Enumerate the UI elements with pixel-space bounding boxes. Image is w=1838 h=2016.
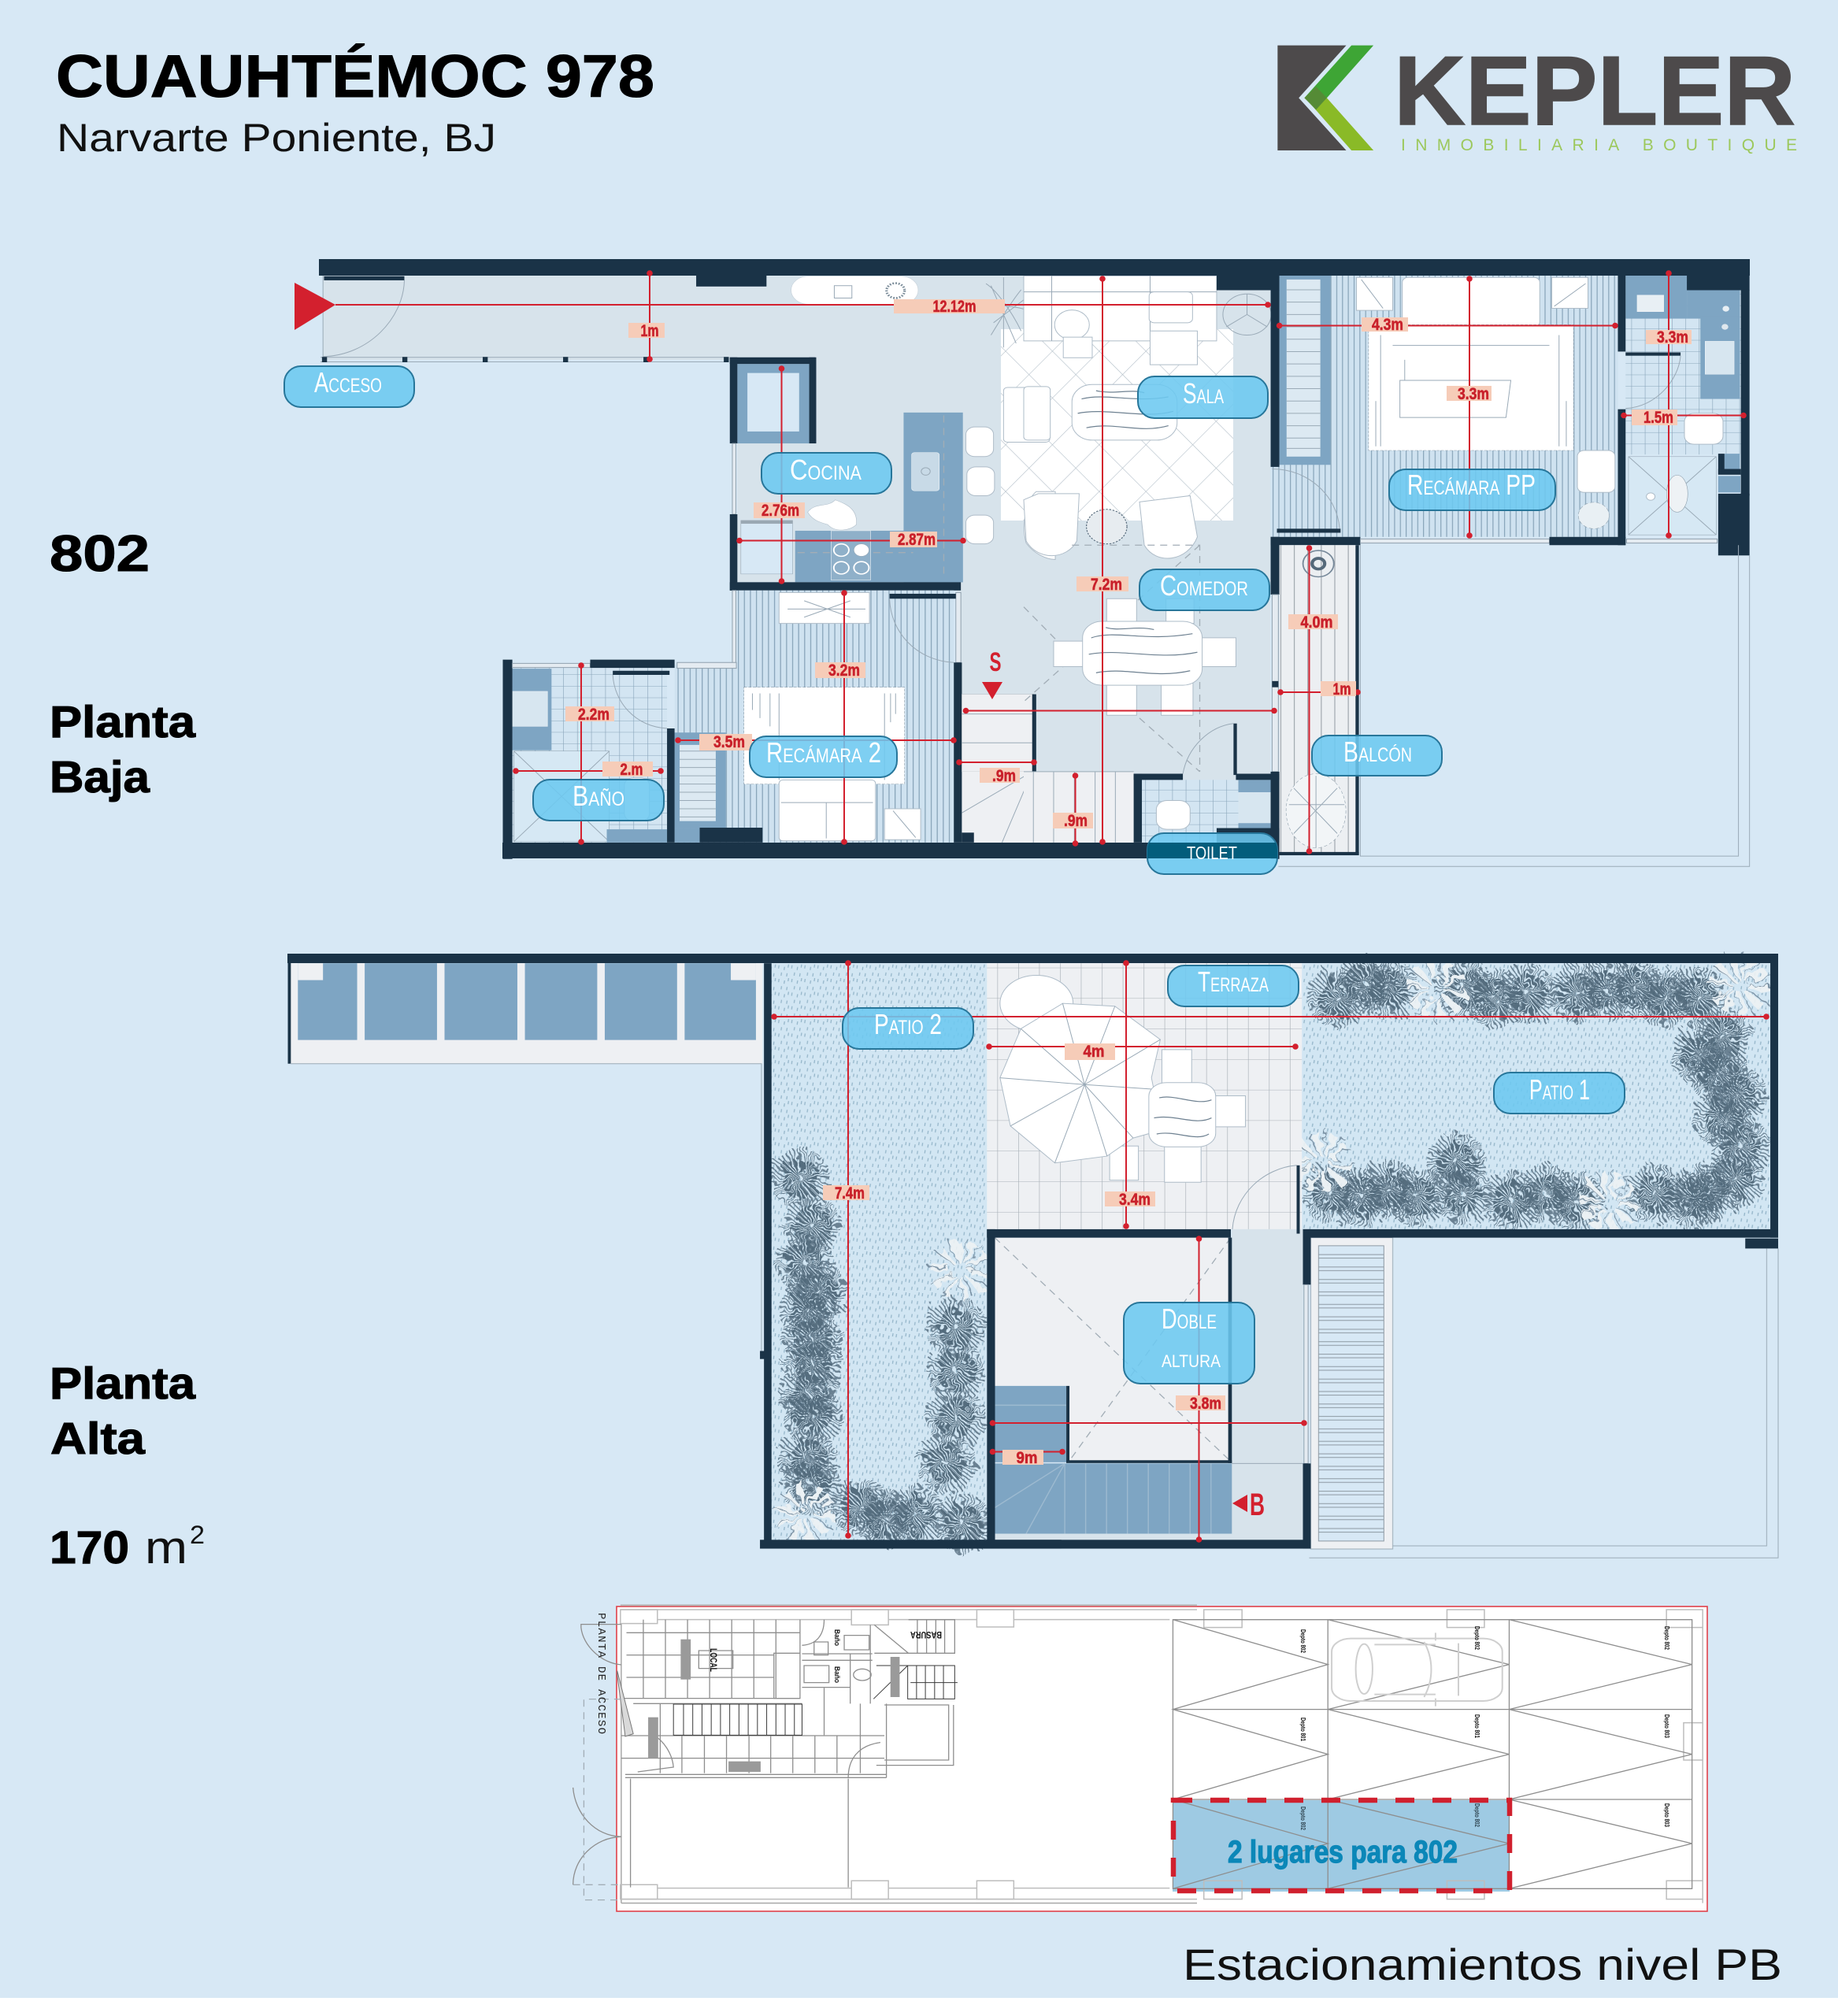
label: Sala: Sala	[1183, 377, 1224, 410]
car	[1332, 1632, 1503, 1707]
icon: K mark	[1277, 46, 1373, 150]
dimension 2.2m	[565, 665, 614, 842]
dimension 4.3m	[1280, 316, 1615, 334]
label: Baño: Baño	[573, 780, 624, 812]
dimension 12.12m: 12.12m	[932, 298, 976, 316]
patio 1	[1302, 963, 1770, 1229]
area: 170 m2: m	[145, 1522, 187, 1573]
kitchen	[730, 358, 995, 591]
logo tagline: INMOBILIARIA BOUTIQUE	[1401, 136, 1797, 154]
label: Recámara PP	[1389, 469, 1555, 510]
coffee table	[1072, 384, 1177, 440]
terrace	[987, 963, 1302, 1229]
space tags: Depto 802	[1663, 1626, 1670, 1650]
dimension 3.5m	[678, 733, 954, 751]
space tags: Depto 801	[1473, 1714, 1480, 1738]
room tag: Basura: BASURA	[910, 1629, 942, 1640]
logo: Kepler Inmobiliaria Boutique	[1277, 37, 1797, 154]
heading: Planta Baja	[50, 697, 196, 802]
dimension 2.76m: 2.76m	[762, 502, 799, 520]
label: Terraza	[1168, 965, 1299, 1006]
label: Balcón	[1312, 736, 1442, 776]
label: Recámara PP: Recámara PP	[1407, 469, 1536, 501]
stairs down marker B	[1232, 1488, 1265, 1522]
room tag: Baño lower: Baño	[833, 1666, 841, 1683]
label: Patio 2: Patio 2	[874, 1008, 942, 1040]
balcony	[1271, 537, 1750, 866]
stairs down marker B: B	[1250, 1488, 1265, 1522]
dimension 4.0m: 4.0m	[1301, 613, 1332, 632]
label: Comedor: Comedor	[1160, 569, 1248, 602]
area: 170 m2: 170	[50, 1522, 129, 1573]
space tags: Depto 802	[1473, 1803, 1480, 1827]
stairs up marker S: S	[989, 647, 1002, 677]
dimension 9m: 9m	[1016, 1449, 1038, 1467]
toilet	[1134, 724, 1280, 859]
label: Toilet: TOILET	[1187, 843, 1237, 863]
space tags	[1299, 1626, 1670, 1830]
caption: Estacionamientos nivel PB: Estacionamientos nivel PB	[1183, 1940, 1782, 1989]
parking callout: 2 lugares para 802	[1228, 1835, 1458, 1870]
armchairs	[1024, 494, 1079, 556]
dimension 3.2m	[815, 593, 865, 842]
label: Patio 2	[843, 1008, 973, 1049]
label: Recámara 2	[750, 736, 897, 777]
parking access caption: PLANTA DE ACCESO	[595, 1613, 607, 1734]
dimension .9m: .9m	[992, 767, 1016, 785]
dimension 1m balcony: 1m	[1332, 680, 1351, 699]
label: Cocina	[762, 453, 891, 494]
dimension 2.76m	[754, 369, 805, 581]
parking sheet	[617, 1606, 1707, 1911]
dimension 7.2m: 7.2m	[1091, 576, 1122, 594]
access arrow	[295, 283, 335, 330]
rug	[1001, 329, 1233, 521]
bedroom 2	[675, 591, 962, 843]
dimension .9m stairs: .9m	[1064, 812, 1088, 830]
heading: Planta Alta	[50, 1358, 196, 1464]
logo wordmark: KEPLER	[1394, 37, 1795, 146]
dimension 1m	[628, 273, 665, 359]
space tags: Depto 803	[1663, 1714, 1670, 1738]
dimension 3.8m: 3.8m	[1190, 1395, 1221, 1413]
heading: Planta Alta: Planta	[50, 1358, 196, 1409]
dimension 12.12m	[335, 298, 1268, 316]
panel: floor plan planta alta	[287, 954, 1778, 1558]
dimension 3.4m: 3.4m	[1119, 1191, 1151, 1209]
label: Baño	[533, 780, 664, 821]
dimension 3.3m bath: 3.3m	[1657, 328, 1688, 346]
master bathroom	[1618, 276, 1750, 555]
access corridor	[321, 276, 918, 362]
dimension 3.8m	[1176, 1239, 1225, 1540]
dimension 3.4m	[1105, 963, 1155, 1226]
dimension 3.2m: 3.2m	[828, 662, 860, 680]
label: Acceso: Acceso	[314, 366, 382, 398]
unit number: 802	[50, 524, 150, 582]
label: Patio 1	[1494, 1073, 1625, 1114]
label: Terraza: Terraza	[1198, 965, 1269, 998]
dimensions planta alta	[774, 963, 1766, 1540]
dimension 4.3m: 4.3m	[1372, 316, 1403, 334]
label: Balcón: Balcón	[1343, 736, 1412, 768]
dimension 7.2m	[1076, 279, 1128, 842]
walls planta alta	[287, 954, 1778, 1549]
label: Doble altura	[1124, 1303, 1254, 1384]
dimension stair width	[965, 710, 1274, 712]
dimension 3.3m bedroom: 3.3m	[1458, 385, 1489, 403]
space tags: Depto 802	[1299, 1807, 1306, 1830]
bedroom PP	[1217, 276, 1625, 545]
label: Acceso	[284, 366, 414, 407]
dimension 2.87m: 2.87m	[898, 531, 936, 549]
dimension 2.87m	[739, 531, 963, 549]
label: Recámara 2: Recámara 2	[766, 736, 881, 769]
dimension 7.4m: 7.4m	[835, 1184, 865, 1203]
dimension 1m balcony	[1280, 680, 1358, 699]
dimension 2m: 2.m	[621, 761, 643, 779]
dimension 3.3m bedroom	[1447, 279, 1492, 536]
label: Toilet	[1147, 833, 1277, 874]
dimension 2m	[516, 761, 661, 779]
highlighted parking fill	[1173, 1800, 1510, 1892]
room tag: Local: LOCAL	[708, 1648, 719, 1672]
dining set	[1106, 598, 1136, 624]
staircase lower run	[1024, 772, 1134, 843]
space tags: Depto 801	[1299, 1718, 1306, 1741]
subtitle: Narvarte Poniente, BJ	[57, 116, 496, 160]
umbrella and table	[1000, 975, 1246, 1182]
parking spaces	[1173, 1610, 1703, 1903]
staircase	[962, 695, 1055, 843]
area: 170 m2: 2	[190, 1521, 205, 1549]
living floor	[323, 276, 1270, 843]
heading: Planta Baja: Planta	[50, 697, 196, 747]
dimension 4m: 4m	[1084, 1043, 1104, 1061]
dimension 4m	[989, 1043, 1295, 1061]
stairs up marker S	[982, 647, 1002, 699]
label: Comedor	[1139, 569, 1269, 610]
dashed highlight border	[1173, 1800, 1510, 1891]
louvers	[1309, 1238, 1778, 1558]
label: Cocina: Cocina	[790, 454, 862, 486]
bathroom	[502, 660, 675, 859]
space tags: Depto 802	[1299, 1629, 1306, 1653]
label: Patio 1: Patio 1	[1529, 1073, 1590, 1106]
living dining furniture	[984, 276, 1271, 772]
dimension 3.3m bath	[1646, 273, 1692, 536]
space tags: Depto 802	[1473, 1626, 1480, 1650]
dimensions planta baja	[335, 273, 1744, 851]
panel: parking plan	[573, 1605, 1707, 1911]
dimension 1.5m: 1.5m	[1643, 409, 1673, 427]
dimension 4.0m	[1288, 548, 1338, 851]
heading: Planta Alta: Alta	[50, 1414, 146, 1464]
room tag: Baño upper: Baño	[833, 1629, 841, 1646]
label: Doble altura: Doble	[1162, 1303, 1217, 1335]
dimension 7.4m	[823, 963, 869, 1536]
panel: floor plan planta baja	[284, 259, 1750, 874]
dimension stairwell	[992, 1422, 1304, 1424]
area: 170 m2	[50, 1521, 205, 1573]
dimension .9m stairs	[1053, 776, 1093, 843]
heading: Planta Baja: Baja	[50, 752, 150, 802]
space tags: Depto 803	[1663, 1803, 1670, 1827]
dimension 1m: 1m	[641, 322, 658, 340]
dimension patio width	[774, 1016, 1766, 1017]
label: Sala	[1138, 376, 1268, 418]
dimension 2.2m: 2.2m	[578, 706, 610, 724]
roof strip	[288, 954, 762, 1351]
plants	[779, 963, 1762, 1545]
plant near sofa	[984, 277, 1055, 560]
patio 2	[772, 963, 988, 1540]
label: Doble altura: ALTURA	[1162, 1351, 1221, 1371]
dimension .9m	[959, 762, 1034, 785]
title: CUAUHTÉMOC 978	[56, 43, 654, 110]
dimension 9m	[992, 1449, 1062, 1467]
ground floor plan	[573, 1605, 1197, 1903]
double height void	[995, 1166, 1303, 1540]
dimension 1.5m	[1624, 409, 1744, 427]
dimension 3.5m: 3.5m	[713, 733, 745, 751]
exterior walls	[319, 259, 1750, 858]
